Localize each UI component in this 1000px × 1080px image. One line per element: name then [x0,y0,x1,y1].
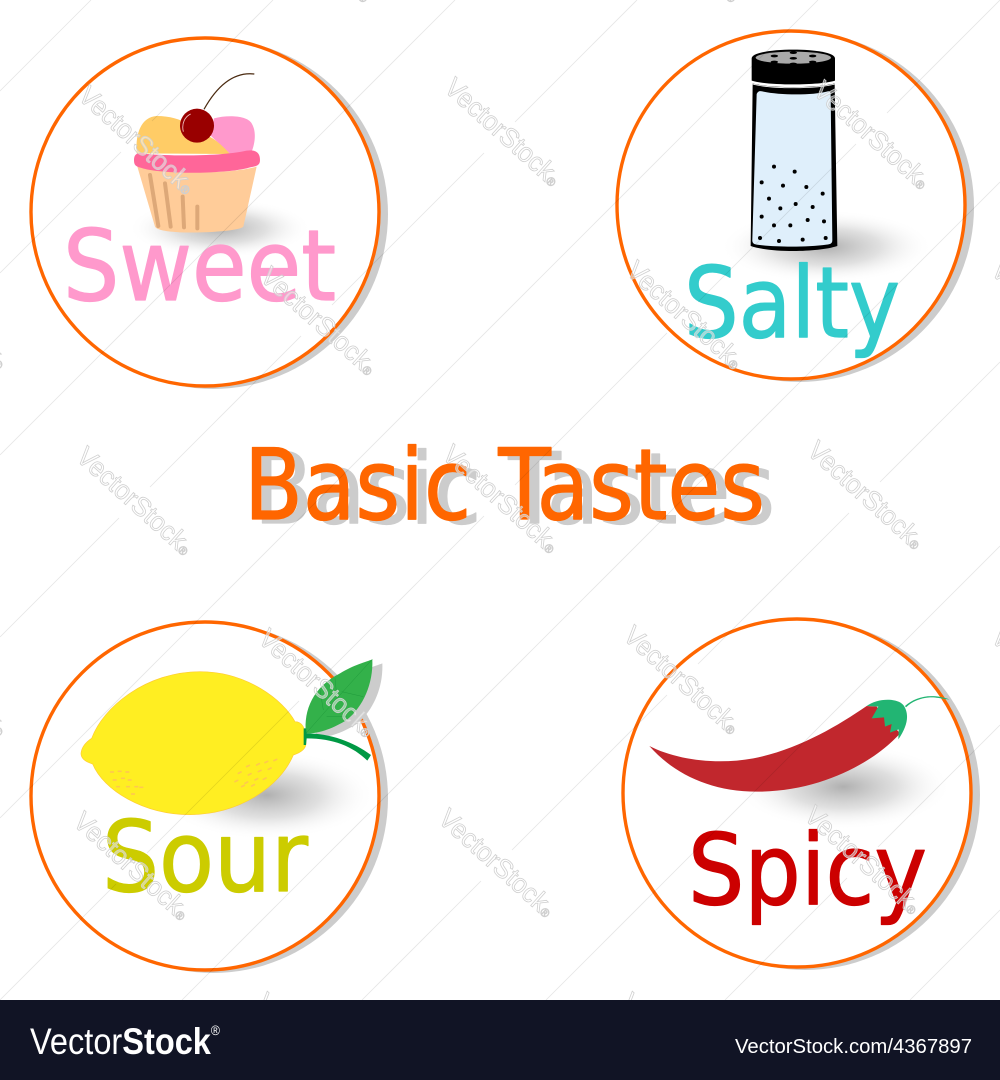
label: salty: Salty [684,247,900,361]
watermarks: VectorStock® [802,435,930,555]
salty circle [617,31,974,382]
panel: spicy [623,619,980,970]
spicy circle [623,619,980,970]
panel: sour [31,622,388,973]
watermarks: VectorStock® [73,80,201,200]
label: spicy: Spicy [688,814,927,928]
watermarks: VectorStock® [799,800,927,920]
icon: lemon [81,659,382,840]
title: Basic Tastes [254,433,775,547]
icon: chili pepper [649,696,952,830]
watermarks: VectorStock® [68,806,196,926]
panel: salty [617,31,974,382]
watermarks: VectorStock® [618,620,746,740]
sour circle [31,622,388,973]
label: sweet: Sweet [63,210,336,324]
watermarks: VectorStock® [433,803,561,923]
icon: cupcake [128,74,312,258]
title: Basic Tastes [244,429,765,543]
watermarks: VectorStock® [253,623,381,743]
watermarks: VectorStock® [439,72,567,192]
watermarks: VectorStock® [808,75,936,195]
panel: sweet [31,38,388,389]
icon: salt shaker [720,50,933,283]
footer url: VectorStock.com/4367897 [735,1036,972,1058]
footer logo: VectorStock [30,1021,223,1062]
footer bar [0,1000,1000,1080]
watermarks: VectorStock® [621,255,749,375]
watermarks: VectorStock® [437,439,565,559]
footer logo: ® [211,1022,221,1038]
sweet circle [31,38,388,389]
label: sour: Sour [102,801,309,915]
watermarks: VectorStock® [255,261,383,381]
watermarks: VectorStock® [71,441,199,561]
